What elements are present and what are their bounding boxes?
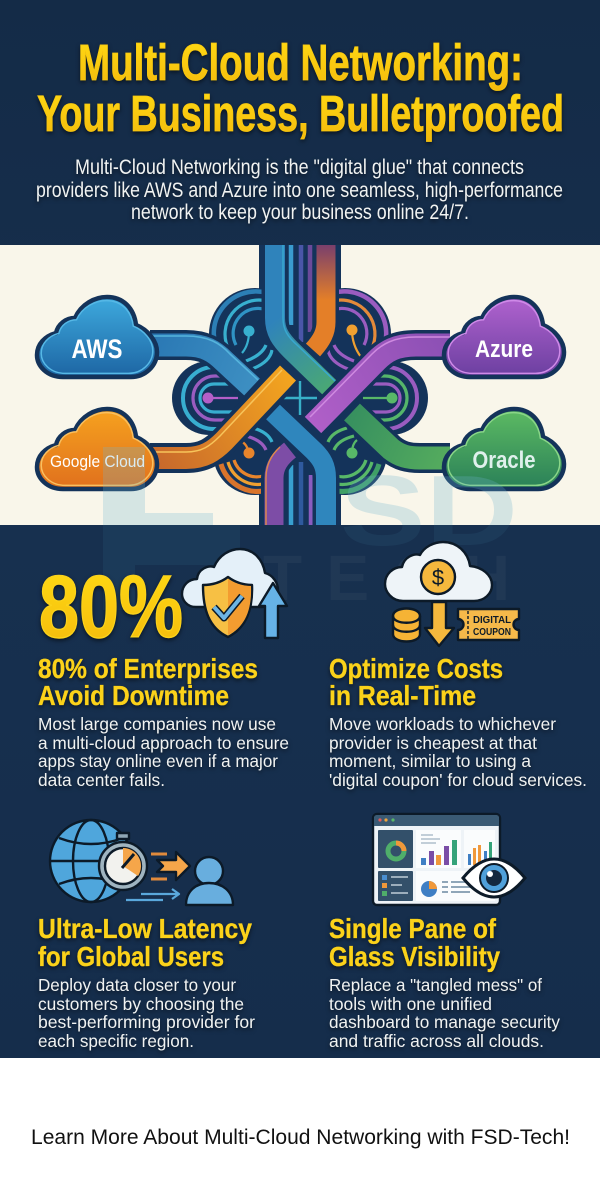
icon: cloud coin coupon: $ — [432, 565, 444, 590]
icon: dashboard with eye — [373, 814, 525, 905]
icon: cloud coin coupon: COUPON — [473, 626, 511, 638]
watermark on navy: FSD Tech logo: TECH — [263, 542, 510, 614]
connector: Oracle to knot — [352, 412, 450, 458]
card: 80% of enterprises — [38, 549, 289, 790]
subtitle: Multi-Cloud Networking is the "digital glue" that connects — [75, 156, 524, 179]
body text: 'digital coupon' for cloud services. — [329, 770, 587, 790]
body text — [329, 975, 560, 1051]
body text — [38, 714, 289, 790]
body text: apps stay online even if a major — [38, 751, 278, 771]
cloud: Google Cloud: Google Cloud — [50, 452, 145, 471]
connector: top orange — [313, 245, 326, 350]
knot rings — [183, 291, 417, 491]
connector: Google Cloud to knot — [150, 370, 288, 458]
heading: Avoid Downtime — [38, 680, 229, 711]
centre cross — [283, 381, 317, 415]
body text: Deploy data closer to your — [38, 975, 236, 995]
title — [37, 34, 564, 142]
watermark on cream: FSD logo — [103, 447, 512, 525]
cloud: Azure — [444, 297, 564, 377]
body text: and traffic across all clouds. — [329, 1031, 544, 1051]
icon: globe stopwatch user — [50, 820, 233, 905]
cloud: Oracle — [444, 409, 564, 489]
heading: Optimize Costs — [329, 653, 503, 684]
icon: cloud coin coupon — [385, 542, 519, 646]
body text: customers by choosing the — [38, 994, 244, 1014]
body text: Most large companies now use — [38, 714, 276, 734]
watermark on navy: FSD Tech logo — [103, 525, 509, 610]
connector: AWS to knot — [150, 336, 258, 387]
subtitle: network to keep your business online 24/7. — [131, 201, 469, 224]
connector: lower blue — [273, 412, 326, 525]
body text: provider is cheapest at that — [329, 733, 537, 753]
heading: Glass Visibility — [329, 941, 501, 972]
knot nodes — [202, 324, 398, 458]
cloud: Oracle: Oracle — [472, 447, 536, 474]
watermark on cream: FSD logo: SD — [340, 455, 518, 567]
heading — [329, 653, 503, 711]
body text: Replace a "tangled mess" of — [329, 975, 542, 995]
cloud: AWS: AWS — [72, 334, 122, 364]
body text: moment, similar to using a — [329, 751, 531, 771]
vertical strips — [291, 245, 311, 525]
heading: for Global Users — [38, 941, 224, 972]
heading: Ultra-Low Latency — [38, 913, 253, 944]
body text — [329, 714, 587, 790]
big stat: 80% — [39, 557, 183, 656]
heading — [38, 653, 258, 711]
cloud: AWS — [37, 297, 157, 377]
icon: cloud with shield and arrow — [182, 549, 287, 638]
central knot backing — [172, 245, 428, 525]
body text: Move workloads to whichever — [329, 714, 556, 734]
watermark on navy: FSD Tech logo: SD — [340, 455, 518, 567]
connector: bottom purple — [266, 447, 290, 525]
body text: a multi-cloud approach to ensure — [38, 733, 289, 753]
icon: cloud coin coupon: DIGITAL — [473, 614, 512, 626]
body text — [38, 975, 255, 1051]
heading — [38, 913, 253, 972]
footer call to action: Learn More About Multi-Cloud Networking with FSD-Tech! — [31, 1126, 570, 1149]
body text: data center fails. — [38, 770, 165, 790]
illustration: interwoven cloud network — [0, 245, 600, 525]
body text: tools with one unified — [329, 994, 492, 1014]
body text: best-performing provider for — [38, 1012, 255, 1032]
heading: 80% of Enterprises — [38, 653, 258, 684]
cloud: Google Cloud — [37, 409, 157, 489]
connector: top blue to green — [275, 245, 336, 388]
body text: each specific region. — [38, 1031, 194, 1051]
card: ultra-low latency — [38, 820, 255, 1051]
card: optimize costs — [329, 542, 587, 790]
body text: dashboard to manage security — [329, 1012, 560, 1032]
cloud: Azure: Azure — [475, 336, 533, 363]
heading: in Real-Time — [329, 680, 476, 711]
heading — [329, 913, 501, 972]
card: single pane of glass — [329, 814, 560, 1051]
connector: Azure to knot — [310, 337, 450, 425]
heading: Single Pane of — [329, 913, 497, 944]
subtitle — [36, 156, 563, 224]
